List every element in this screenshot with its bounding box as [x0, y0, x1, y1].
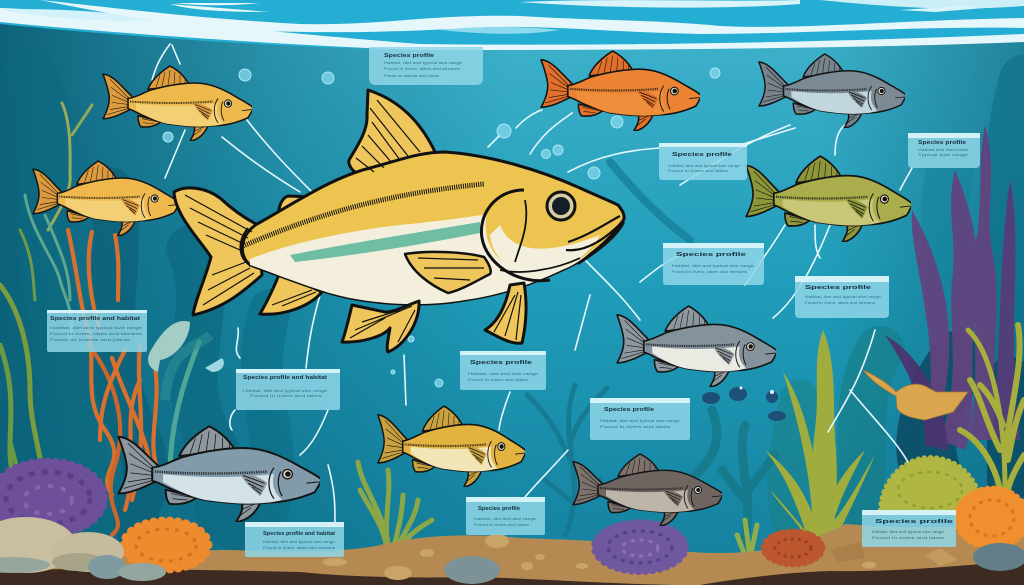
rock centre [444, 556, 500, 584]
connector lines [152, 44, 912, 522]
small fish: orange [541, 51, 701, 131]
belly [250, 214, 598, 304]
rocks left [0, 517, 166, 581]
water surface [0, 0, 1024, 50]
coral: yellow green [881, 458, 981, 510]
sand floor [0, 520, 1024, 585]
label 2: Species profile [672, 152, 732, 158]
small dorsal fin [278, 196, 312, 216]
flat brown fish [863, 370, 968, 420]
label 5 [795, 276, 889, 318]
label 4 [663, 243, 764, 285]
coral: purple left [0, 462, 104, 534]
dorsal fin [349, 90, 436, 176]
branching plant right [960, 325, 1024, 490]
label 2 [659, 143, 747, 180]
label 6: Found in rivers, lakes and streams [50, 332, 142, 336]
label 7: Habitat, diet and typical size range [243, 389, 327, 393]
eye [547, 192, 575, 220]
label 7: Found in rivers and lakes [250, 394, 322, 398]
tail fin [174, 188, 262, 315]
small green plant centre [358, 462, 432, 558]
label 12: Habitat, diet and typical size range [872, 530, 944, 534]
label 3 [908, 133, 980, 168]
stripe [290, 222, 480, 262]
label 1: Feeds on insects and plants [384, 74, 439, 78]
bubbles [163, 68, 720, 387]
coral: red [764, 532, 822, 564]
label 1: Habitat, diet and typical size range [384, 61, 462, 65]
label 8: Species profile [470, 360, 532, 366]
label 8: Found in rivers and lakes [468, 378, 528, 382]
background seaweed silhouettes [30, 70, 1024, 540]
label 10: Habitat, diet and size range [474, 517, 536, 521]
label 3: Habitat and diet notes [918, 148, 968, 152]
small fish: grey top right [759, 54, 906, 128]
label 10 [466, 497, 545, 535]
label 2: Found in rivers and lakes [668, 169, 728, 173]
pelvic fin [342, 301, 419, 352]
small fish: yellow centre [378, 406, 526, 487]
label 7: Species profile and habitat [243, 375, 327, 381]
label 6: Species profile and habitat [50, 316, 140, 322]
small green plant [737, 520, 757, 558]
green plants right [765, 330, 875, 542]
label 3: Species profile [918, 140, 966, 146]
label 3: Typical size range [918, 153, 968, 157]
purple kelp [885, 125, 1020, 450]
rear belly fin [260, 272, 322, 314]
tail arc [240, 228, 248, 263]
anal fin [485, 283, 526, 343]
label 9: Species profile [604, 407, 654, 413]
label 4: Species profile [676, 252, 746, 258]
small dark fish [702, 386, 786, 421]
label 6: Feeds on insects and plants [50, 338, 130, 342]
label 9: Found in rivers and lakes [600, 425, 670, 429]
label 11: Found in rivers, lakes and streams [263, 546, 335, 550]
label 4: Habitat, diet and typical size range [672, 264, 754, 268]
label 8: Habitat, diet and size range [468, 372, 538, 376]
orange seaweed [68, 230, 158, 535]
label 5: Species profile [805, 285, 871, 291]
coral: orange right [957, 489, 1024, 547]
rock right [973, 543, 1024, 571]
label 5: Habitat, diet and typical size range [805, 295, 881, 299]
pectoral fin [405, 252, 491, 293]
small fish: silver centre right [617, 306, 777, 387]
label 1: Found in rivers, lakes and streams [384, 67, 460, 71]
label 12: Species profile [875, 519, 953, 525]
coral: purple centre [595, 523, 685, 571]
label 9: Habitat, diet and typical size range [600, 419, 680, 423]
label 9 [590, 398, 690, 440]
label 1 [369, 47, 483, 85]
label 6 [47, 310, 147, 352]
label 10: Found in rivers and lakes [474, 523, 529, 527]
small fish: green [746, 156, 912, 242]
label 10: Species profile [478, 506, 520, 512]
lower jaw [566, 216, 624, 264]
label 11: Habitat, diet and typical size range [263, 540, 335, 544]
label 4: Found in rivers, lakes and streams [672, 270, 747, 274]
small fish: yellow top left [103, 66, 253, 141]
label 12 [862, 510, 956, 547]
teal seaweed and ghost fish [148, 321, 224, 475]
body [242, 152, 624, 304]
small fish: silver lower left [118, 426, 321, 522]
small fish: yellow left [33, 161, 179, 236]
lateral line [243, 184, 484, 246]
label 8 [460, 351, 546, 390]
label 11: Species profile and habitat [263, 531, 335, 537]
cheek [490, 225, 600, 276]
label 11 [245, 522, 344, 557]
label 7 [236, 369, 340, 410]
coral: orange left [124, 521, 208, 569]
gill cover [481, 190, 550, 281]
fin rays [185, 100, 521, 342]
gill inner [500, 200, 580, 272]
label 12: Found in rivers and lakes [872, 536, 944, 540]
small fish: dark lower centre [573, 454, 723, 526]
label 5: Found in rivers, lakes and streams [805, 301, 875, 305]
label 1: Species profile [384, 53, 434, 59]
label 6: Habitat, diet and typical size range [50, 326, 142, 330]
left green seaweed [0, 103, 92, 490]
label 2: Habitat, diet and typical size range [668, 164, 740, 168]
main yellow fish [174, 90, 624, 352]
